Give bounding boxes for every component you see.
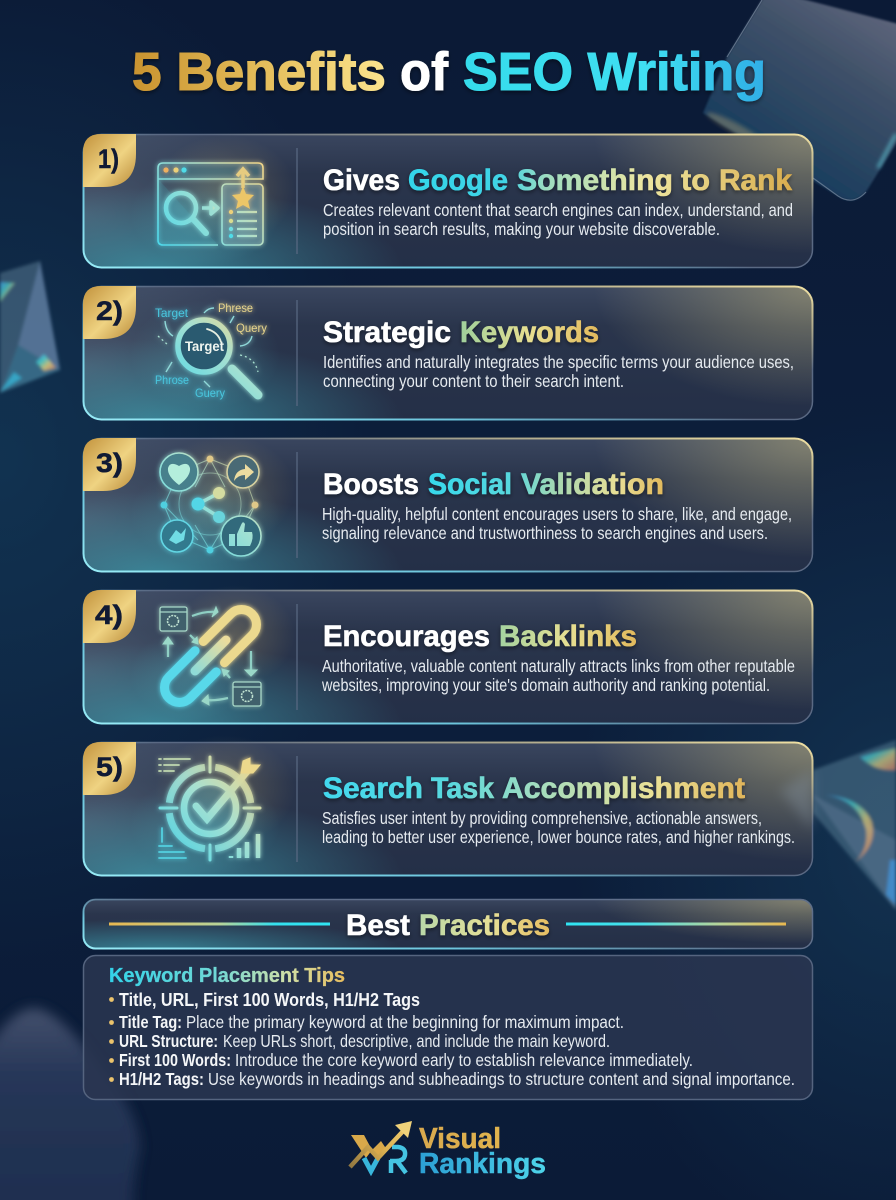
logo: Visual Rankings <box>350 1121 546 1180</box>
heading 4: Backlinks <box>499 620 637 653</box>
heading 5: Accomplishment <box>502 772 745 805</box>
bullet first 100 words: First 100 Words: <box>119 1050 231 1070</box>
number badge 2 <box>83 286 136 339</box>
panel: benefit 3 <box>83 435 813 572</box>
decoration: blurred blob bottom left <box>0 1008 140 1200</box>
heading: best practices: Best <box>346 909 410 942</box>
bullet bold summary: Title, URL, First 100 Words, H1/H2 Tags <box>119 989 420 1010</box>
title: 5 Benefits <box>132 42 386 102</box>
heading 5: Task <box>431 772 494 805</box>
panel: best practices banner <box>83 899 813 949</box>
icon: target with checkmark and arrow <box>159 757 260 860</box>
heading 1: Rank <box>719 164 792 197</box>
rule left <box>109 922 330 926</box>
panel: benefit 1 <box>83 134 813 268</box>
number badge 3 <box>83 438 136 491</box>
icon: magnifier with keywords: Phrose <box>155 373 189 387</box>
subheading: Keyword Placement Tips <box>109 964 345 987</box>
divider 5 <box>296 756 298 862</box>
heading 3 <box>323 468 664 501</box>
description 5 <box>322 808 795 847</box>
bullet first 100 words <box>109 1050 693 1070</box>
bullet url structure <box>109 1031 610 1051</box>
icon: magnifier with keywords: Target <box>155 306 189 320</box>
description 5: Satisfies user intent by providing comprehensive, actionable answers, <box>322 808 762 828</box>
icon: magnifier with keywords: Target <box>185 338 224 354</box>
heading 1: Gives <box>323 164 400 197</box>
description 3: signaling relevance and trustworthiness to search engines and users. <box>322 523 768 543</box>
number badge 1: 1) <box>98 144 119 174</box>
description 5: leading to better user experience, lower bounce rates, and higher rankings. <box>322 827 795 847</box>
heading 4: Encourages <box>323 620 490 653</box>
number badge 4 <box>83 590 136 643</box>
divider 3 <box>296 452 298 558</box>
heading: best practices <box>346 909 550 942</box>
decoration: glass panel top right <box>703 0 896 200</box>
title <box>132 42 766 102</box>
bullet first 100 words: Introduce the core keyword early to establish relevance immediately. <box>235 1050 693 1070</box>
number badge 2: 2) <box>96 296 123 326</box>
logo wordmark: Rankings <box>419 1148 546 1180</box>
heading 1: Something <box>517 164 673 197</box>
logo wordmark: Visual <box>419 1123 501 1155</box>
heading 1: to <box>681 164 710 197</box>
description 4 <box>321 656 795 695</box>
heading 3: Validation <box>521 468 664 501</box>
decoration: prism right <box>813 740 896 910</box>
description 3 <box>322 504 792 543</box>
decoration: prism left <box>0 261 60 393</box>
panel: benefit 2 <box>83 286 813 420</box>
number badge 3: 3) <box>96 448 123 478</box>
panel: benefit 4 <box>83 585 813 724</box>
divider 1 <box>296 148 298 254</box>
number badge 4: 4) <box>95 600 123 630</box>
heading 1: Google <box>408 164 508 197</box>
heading 5: Search <box>323 772 423 805</box>
description 3: High-quality, helpful content encourages users to share, like, and engage, <box>322 504 792 524</box>
number badge 1 <box>83 134 136 187</box>
title: of <box>400 42 449 102</box>
divider 4 <box>296 604 298 710</box>
description 2: connecting your content to their search intent. <box>323 371 624 391</box>
icon: search window with ranked list <box>158 163 263 245</box>
icon: magnifier with keywords: Guery <box>195 386 225 400</box>
icon: social network <box>160 453 261 556</box>
bullet title tag: Place the primary keyword at the beginning for maximum impact. <box>186 1012 624 1032</box>
description 4: Authoritative, valuable content naturally attracts links from other reputable <box>322 656 795 676</box>
logo wordmark <box>419 1123 546 1180</box>
heading 2: Strategic <box>323 316 451 349</box>
description 2: Identifies and naturally integrates the specific terms your audience uses, <box>323 352 794 372</box>
description 1 <box>323 200 793 239</box>
heading 5 <box>323 772 745 805</box>
description 4: websites, improving your site's domain authority and ranking potential. <box>321 675 770 695</box>
bullet title tag: Title Tag: <box>119 1012 182 1032</box>
title: SEO Writing <box>463 42 766 102</box>
rule right <box>566 922 786 926</box>
logo mark <box>350 1121 412 1173</box>
heading 1 <box>323 164 792 197</box>
description 1: position in search results, making your website discoverable. <box>323 219 720 239</box>
heading 4 <box>323 620 637 653</box>
icon: magnifier with keywords: Phrese <box>218 301 253 315</box>
icon: magnifier with keywords: Query <box>236 321 267 335</box>
heading 3: Boosts <box>323 468 419 501</box>
description 1: Creates relevant content that search engines can index, understand, and <box>323 200 793 220</box>
number badge 5 <box>83 742 136 795</box>
bullet url structure: URL Structure: <box>119 1031 218 1051</box>
number badge 5: 5) <box>96 752 123 782</box>
divider 2 <box>296 300 298 406</box>
heading 2: Keywords <box>460 316 599 349</box>
description 2 <box>323 352 794 391</box>
icon: chain link with websites <box>158 603 263 709</box>
panel: keyword placement tips <box>83 955 813 1100</box>
bullet h1/h2 tags: Use keywords in headings and subheadings to structure content and signal importance. <box>208 1069 795 1089</box>
heading 3: Social <box>428 468 512 501</box>
bullet h1/h2 tags: H1/H2 Tags: <box>119 1069 204 1089</box>
heading 2 <box>323 316 599 349</box>
panel: benefit 5 <box>83 735 813 876</box>
heading: best practices: Practices <box>419 909 550 942</box>
bullet url structure: Keep URLs short, descriptive, and include the main keyword. <box>223 1031 610 1051</box>
icon: magnifier with keywords <box>155 301 267 400</box>
